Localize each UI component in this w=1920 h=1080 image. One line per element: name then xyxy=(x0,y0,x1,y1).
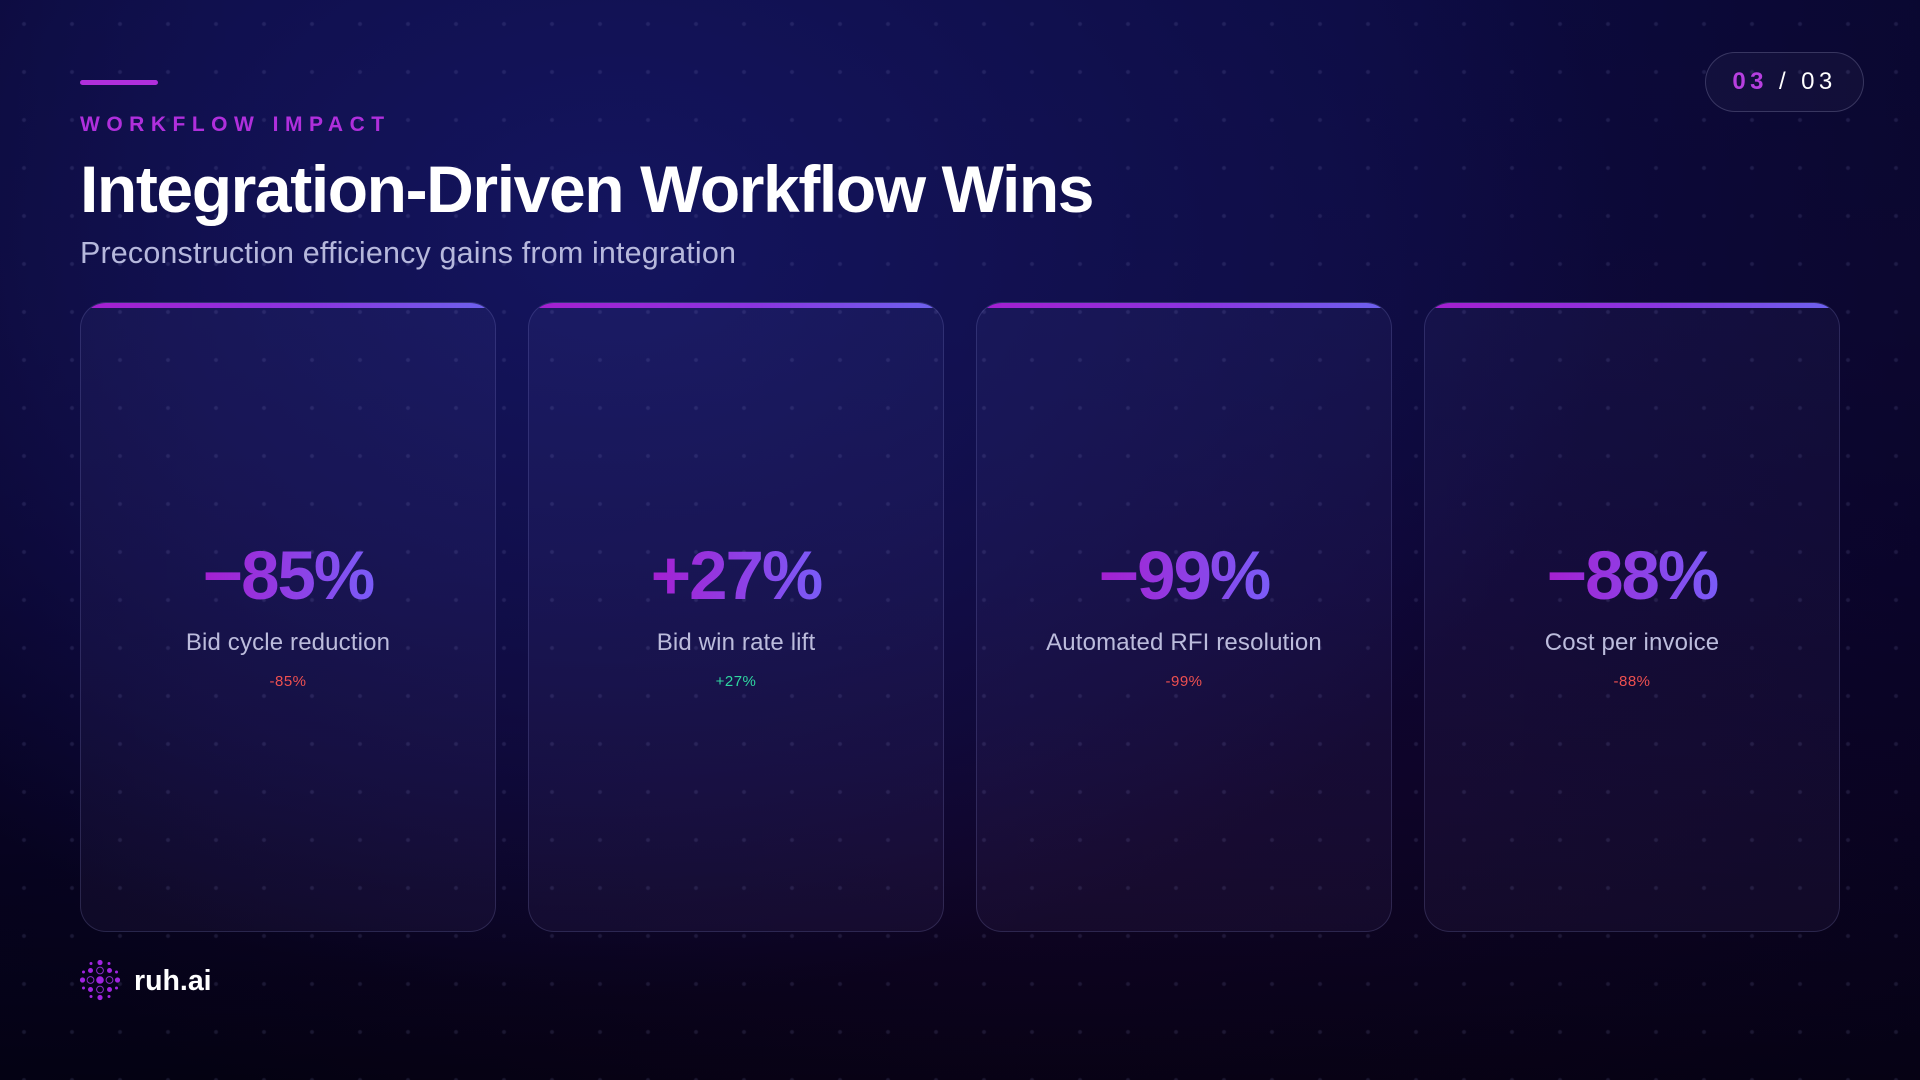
eyebrow label: WORKFLOW IMPACT xyxy=(80,113,391,136)
metric delta: -88% xyxy=(1613,673,1651,690)
panel: automated RFI resolution xyxy=(976,302,1392,932)
metric value: −88% xyxy=(1547,537,1717,614)
metric delta: -99% xyxy=(1165,673,1203,690)
card top accent xyxy=(1425,303,1839,308)
panel: cost per invoice xyxy=(1424,302,1840,932)
metric delta: +27% xyxy=(716,673,756,690)
title: Integration-Driven Workflow Wins xyxy=(80,152,1093,226)
subtitle: Preconstruction efficiency gains from integration xyxy=(80,236,736,270)
page badge xyxy=(1705,52,1864,112)
metric value: +27% xyxy=(651,537,821,614)
icon: logo mark xyxy=(80,960,120,1000)
card top accent xyxy=(81,303,495,308)
metric label: Cost per invoice xyxy=(1545,629,1719,656)
accent bar xyxy=(80,80,158,85)
card top accent xyxy=(529,303,943,308)
metric value: −85% xyxy=(203,537,373,614)
card top accent xyxy=(977,303,1391,308)
panel: bid win rate lift xyxy=(528,302,944,932)
page badge: 03 / 03 xyxy=(1732,68,1837,95)
metric value: −99% xyxy=(1099,537,1269,614)
metric label: Bid win rate lift xyxy=(657,629,815,656)
logo wordmark: ruh.ai xyxy=(134,965,212,997)
metric label: Bid cycle reduction xyxy=(186,629,390,656)
panel: bid cycle reduction xyxy=(80,302,496,932)
metric delta: -85% xyxy=(269,673,307,690)
metric label: Automated RFI resolution xyxy=(1046,629,1322,656)
